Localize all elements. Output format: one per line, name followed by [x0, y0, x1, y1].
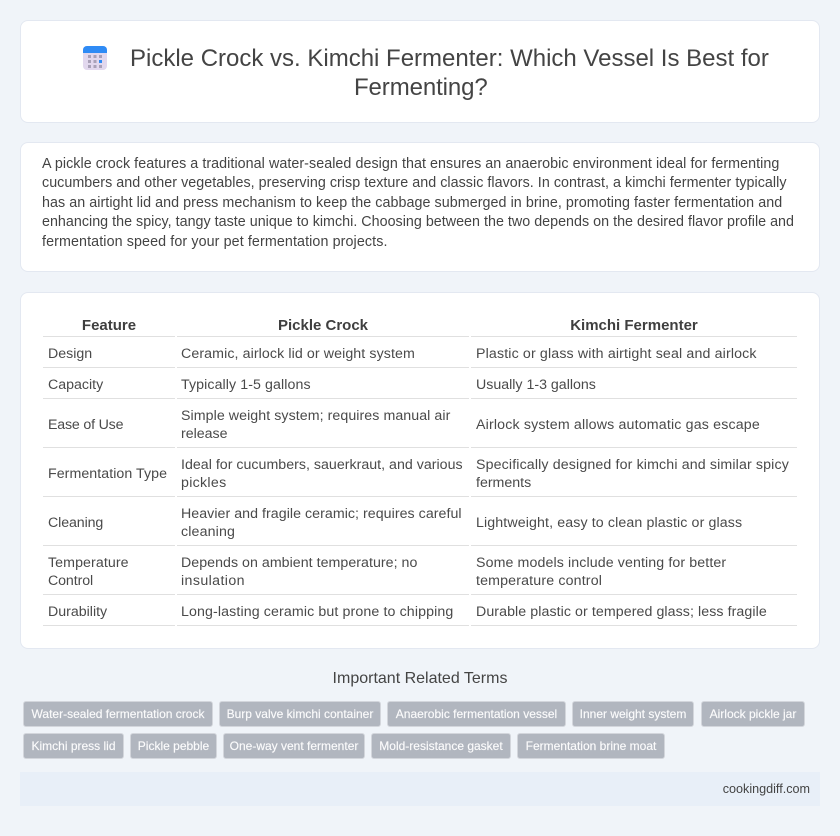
row: design: Ceramic, airlock lid or weight system — [181, 346, 415, 362]
comparison table — [43, 317, 797, 626]
row: durability: Durable plastic or tempered glass; less fragile — [476, 604, 767, 620]
row: temperature control: Some models include venting for better — [476, 555, 726, 571]
tag: Burp valve kimchi container — [227, 707, 373, 721]
row: temperature control — [48, 555, 726, 589]
row: temperature control: Depends on ambient temperature; no — [181, 555, 417, 571]
row: ease of use: Simple weight system; requires manual air — [181, 408, 450, 424]
row: durability — [48, 604, 767, 620]
row: durability: Long-lasting ceramic but prone to chipping — [181, 604, 453, 620]
tag — [223, 733, 365, 759]
row: cleaning — [48, 506, 742, 540]
tag: One-way vent fermenter — [230, 739, 358, 753]
tag: Water-sealed fermentation crock — [32, 707, 204, 721]
title: Fermenting? — [354, 74, 488, 101]
row: temperature control: temperature control — [476, 573, 602, 589]
row: design — [48, 346, 757, 362]
row: fermentation type: Fermentation Type — [48, 466, 167, 482]
intro text: enhancing the spicy, tangy taste unique to kimchi. Choosing between the two depends on the desired flavor profile and — [42, 214, 794, 230]
table header row: Pickle Crock — [278, 317, 368, 334]
intro text: fermentation speed for your pet fermentation projects. — [42, 234, 388, 250]
row: ease of use: release — [181, 426, 228, 442]
row: design: Plastic or glass with airtight seal and airlock — [476, 346, 757, 362]
row: capacity: Typically 1-5 gallons — [181, 377, 311, 393]
row: cleaning: Cleaning — [48, 515, 103, 531]
row: ease of use: Airlock system allows automatic gas escape — [476, 417, 760, 433]
tag — [371, 733, 511, 759]
row: temperature control: Temperature — [48, 555, 129, 571]
tag — [572, 701, 694, 727]
row: temperature control: insulation — [181, 573, 245, 589]
row: fermentation type: pickles — [181, 475, 226, 491]
tag: Anaerobic fermentation vessel — [396, 707, 557, 721]
intro text — [42, 156, 794, 250]
table header row: Kimchi Fermenter — [570, 317, 698, 334]
table panel — [20, 292, 820, 649]
tag: Airlock pickle jar — [710, 707, 796, 721]
intro text: has an airtight lid and press mechanism to keep the cabbage submerged in brine, promoting faster fermentation and — [42, 195, 782, 211]
table header row — [82, 317, 698, 334]
intro text: A pickle crock features a traditional water-sealed design that ensures an anaerobic environment ideal for fermenting — [42, 156, 779, 172]
row: capacity: Usually 1-3 gallons — [476, 377, 596, 393]
row: capacity: Capacity — [48, 377, 103, 393]
tag: Inner weight system — [580, 707, 686, 721]
row: cleaning: Heavier and fragile ceramic; requires careful — [181, 506, 462, 522]
header panel — [20, 20, 820, 123]
intro text: cucumbers and other vegetables, preserving crisp texture and classic flavors. In contrast, a kimchi fermenter typically — [42, 175, 787, 191]
related terms heading: Important Related Terms — [333, 670, 507, 687]
row: cleaning: Lightweight, easy to clean plastic or glass — [476, 515, 742, 531]
row: fermentation type: Ideal for cucumbers, sauerkraut, and various — [181, 457, 463, 473]
row: durability: Durability — [48, 604, 107, 620]
row: temperature control: Control — [48, 573, 93, 589]
row: cleaning: cleaning — [181, 524, 235, 540]
row: ease of use — [48, 408, 760, 442]
tag — [23, 733, 124, 759]
tag: Kimchi press lid — [31, 739, 116, 753]
intro panel — [20, 142, 820, 272]
row: capacity — [48, 377, 596, 393]
tag — [219, 701, 381, 727]
footer: cookingdiff.com — [723, 782, 810, 796]
row: fermentation type — [48, 457, 789, 491]
tag — [517, 733, 665, 759]
title — [130, 45, 769, 101]
tag — [701, 701, 805, 727]
row: fermentation type: ferments — [476, 475, 531, 491]
tag — [130, 733, 217, 759]
tag: Mold-resistance gasket — [379, 739, 503, 753]
icon: calendar — [83, 46, 107, 70]
table header row: Feature — [82, 317, 136, 334]
row: design: Design — [48, 346, 92, 362]
tag — [23, 701, 213, 727]
row: ease of use: Ease of Use — [48, 417, 123, 433]
tag: Fermentation brine moat — [526, 739, 656, 753]
tag: Pickle pebble — [138, 739, 209, 753]
tag — [387, 701, 566, 727]
title: Pickle Crock vs. Kimchi Fermenter: Which Vessel Is Best for — [130, 45, 769, 72]
row: fermentation type: Specifically designed for kimchi and similar spicy — [476, 457, 789, 473]
footer — [20, 772, 820, 806]
